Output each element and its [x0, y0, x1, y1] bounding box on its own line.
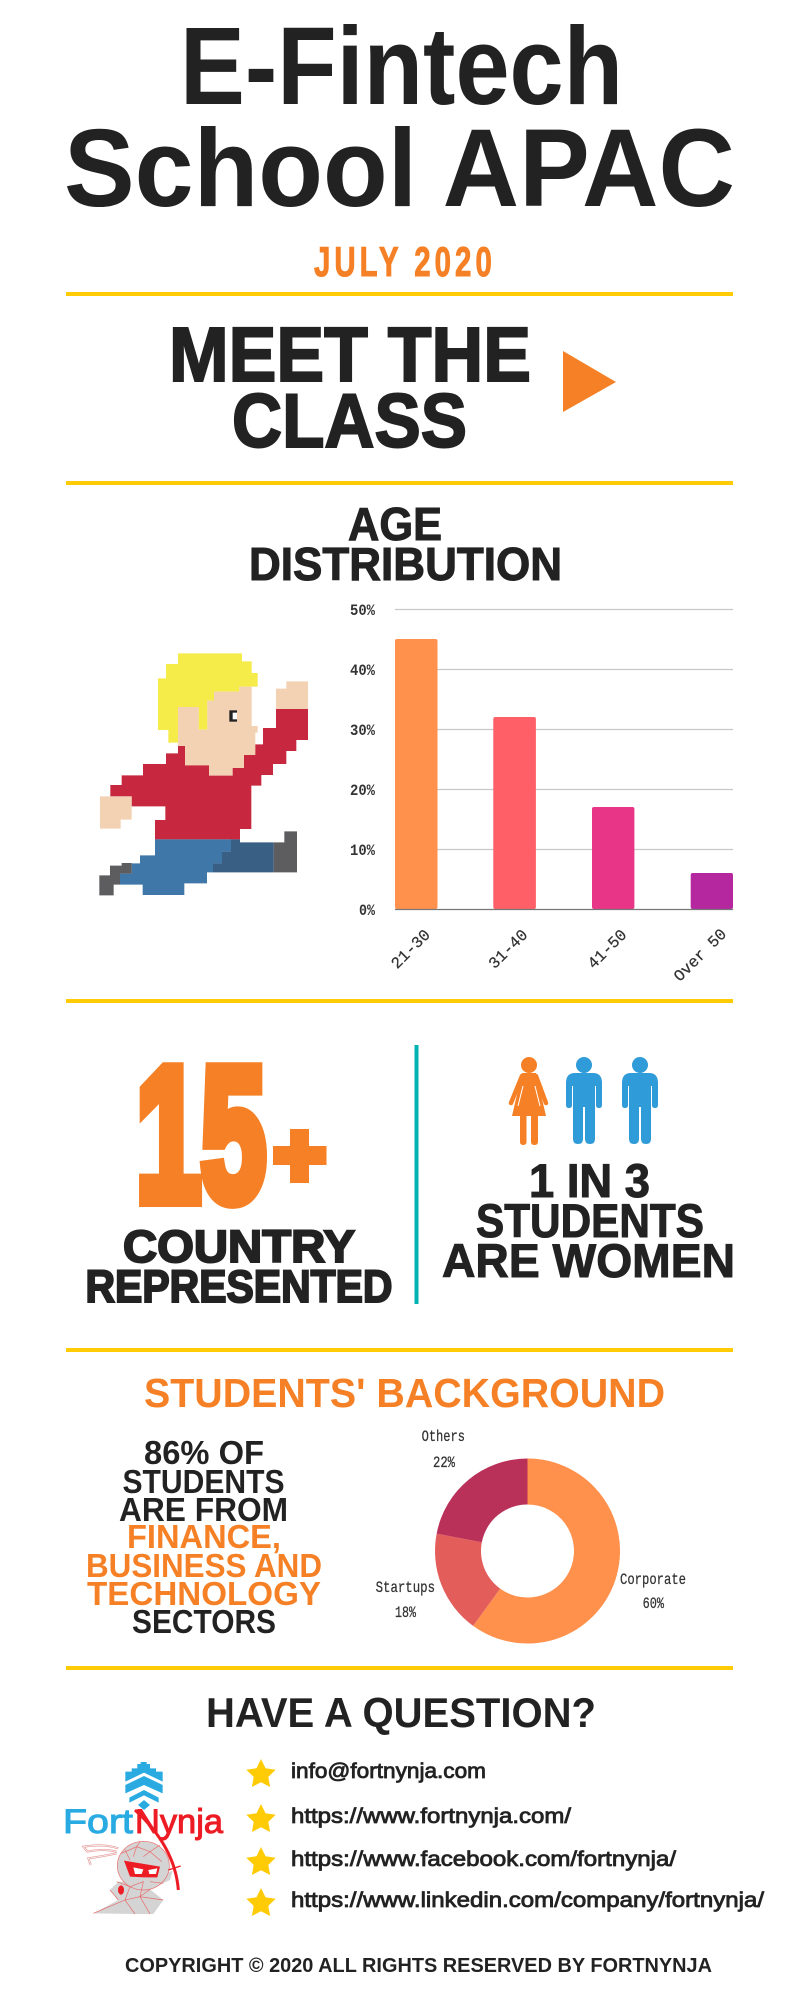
heading: students' background: STUDENTS' BACKGROUND [144, 1370, 665, 1416]
text: 86% of students sectors: SECTORS [132, 1603, 276, 1640]
icon: ninja mascot [83, 1810, 181, 1914]
icon: star 4 [246, 1888, 276, 1916]
logo wordmark: Fort [63, 1803, 134, 1841]
contact: website: https://www.fortnynja.com/ [291, 1805, 571, 1828]
icon: star 2 [246, 1804, 276, 1832]
heading: meet the class: CLASS [232, 379, 467, 464]
text: 86% of students sectors: FINANCE, [127, 1518, 281, 1555]
text: 86% of students sectors: 86% OF [144, 1434, 264, 1471]
text: 86% of students sectors [86, 1434, 322, 1640]
text: 1 in 3 students are women: ARE WOMEN [442, 1234, 735, 1287]
title: School APAC [64, 107, 735, 230]
arrow: orange triangle [563, 351, 616, 412]
stat: 15+ countries: REPRESENTED [86, 1261, 392, 1312]
stat: 15+ countries: 15 [136, 1029, 266, 1241]
contact: linkedin: https://www.linkedin.com/company/fortnynja/ [291, 1889, 764, 1912]
icon: man figure 1 [566, 1057, 602, 1144]
date: July 2020: JULY 2020 [314, 238, 492, 285]
bar chart: age distribution: Over 50 [671, 926, 731, 986]
bar chart: age distribution: 40% [350, 662, 375, 680]
contact: facebook: https://www.facebook.com/fortnynja/ [291, 1848, 676, 1871]
text: 86% of students sectors: ARE FROM [119, 1491, 288, 1528]
icon: pixel art running boy [99, 653, 308, 895]
icon: plus sign [273, 1129, 326, 1183]
footer: copyright: COPYRIGHT © 2020 ALL RIGHTS RESERVED BY FORTNYNJA [125, 1955, 712, 1977]
bar chart: age distribution: 41-50 [584, 926, 631, 973]
text: 1 in 3 students are women: STUDENTS [476, 1194, 704, 1247]
logo: FortNynja [63, 1762, 223, 1914]
heading: age distribution: DISTRIBUTION [249, 538, 562, 590]
donut chart: background: 18% [395, 1604, 416, 1622]
donut chart: background: 22% [433, 1454, 455, 1472]
text: 86% of students sectors: TECHNOLOGY [87, 1575, 321, 1612]
title [64, 5, 735, 230]
bar chart: age distribution: 20% [350, 782, 375, 800]
logo wordmark: Nynja [135, 1803, 223, 1841]
logo wordmark [63, 1803, 223, 1841]
bar chart: age distribution: 30% [350, 722, 375, 740]
heading: age distribution [249, 498, 562, 590]
donut chart: background: Others [422, 1428, 465, 1446]
text: 86% of students sectors: STUDENTS [122, 1463, 284, 1500]
text: 1 in 3 students are women [442, 1154, 735, 1287]
icon: star 3 [246, 1847, 276, 1875]
donut chart: background: Startups [376, 1579, 435, 1597]
icon: star 1 [246, 1759, 276, 1787]
contact: email: info@fortnynja.com [291, 1760, 486, 1783]
divider: teal vertical line [414, 1045, 418, 1304]
donut chart: background: 60% [643, 1595, 664, 1613]
bar chart: age distribution [350, 602, 733, 986]
bar chart: age distribution: 21-30 [388, 926, 435, 973]
title: E-Fintech [180, 5, 623, 128]
heading: have a question: HAVE A QUESTION? [206, 1689, 596, 1736]
donut chart: background: Corporate [620, 1571, 686, 1589]
icon: castle chevrons [125, 1762, 163, 1810]
icon: woman figure [511, 1057, 546, 1145]
donut chart: background [376, 1428, 686, 1644]
heading: age distribution: AGE [348, 498, 442, 550]
stat: 15+ countries: COUNTRY [123, 1221, 355, 1272]
bar chart: age distribution: 10% [350, 842, 375, 860]
text: 86% of students sectors: BUSINESS AND [86, 1547, 322, 1584]
bar chart: age distribution: 31-40 [485, 926, 532, 973]
icon: man figure 2 [622, 1057, 658, 1144]
heading: meet the class [169, 312, 531, 464]
bar chart: age distribution: 50% [350, 602, 375, 620]
bar chart: age distribution: 0% [359, 902, 375, 920]
heading: meet the class: MEET THE [169, 312, 531, 398]
text: 1 in 3 students are women: 1 IN 3 [529, 1154, 650, 1207]
stat: 15+ countries [86, 1029, 392, 1312]
